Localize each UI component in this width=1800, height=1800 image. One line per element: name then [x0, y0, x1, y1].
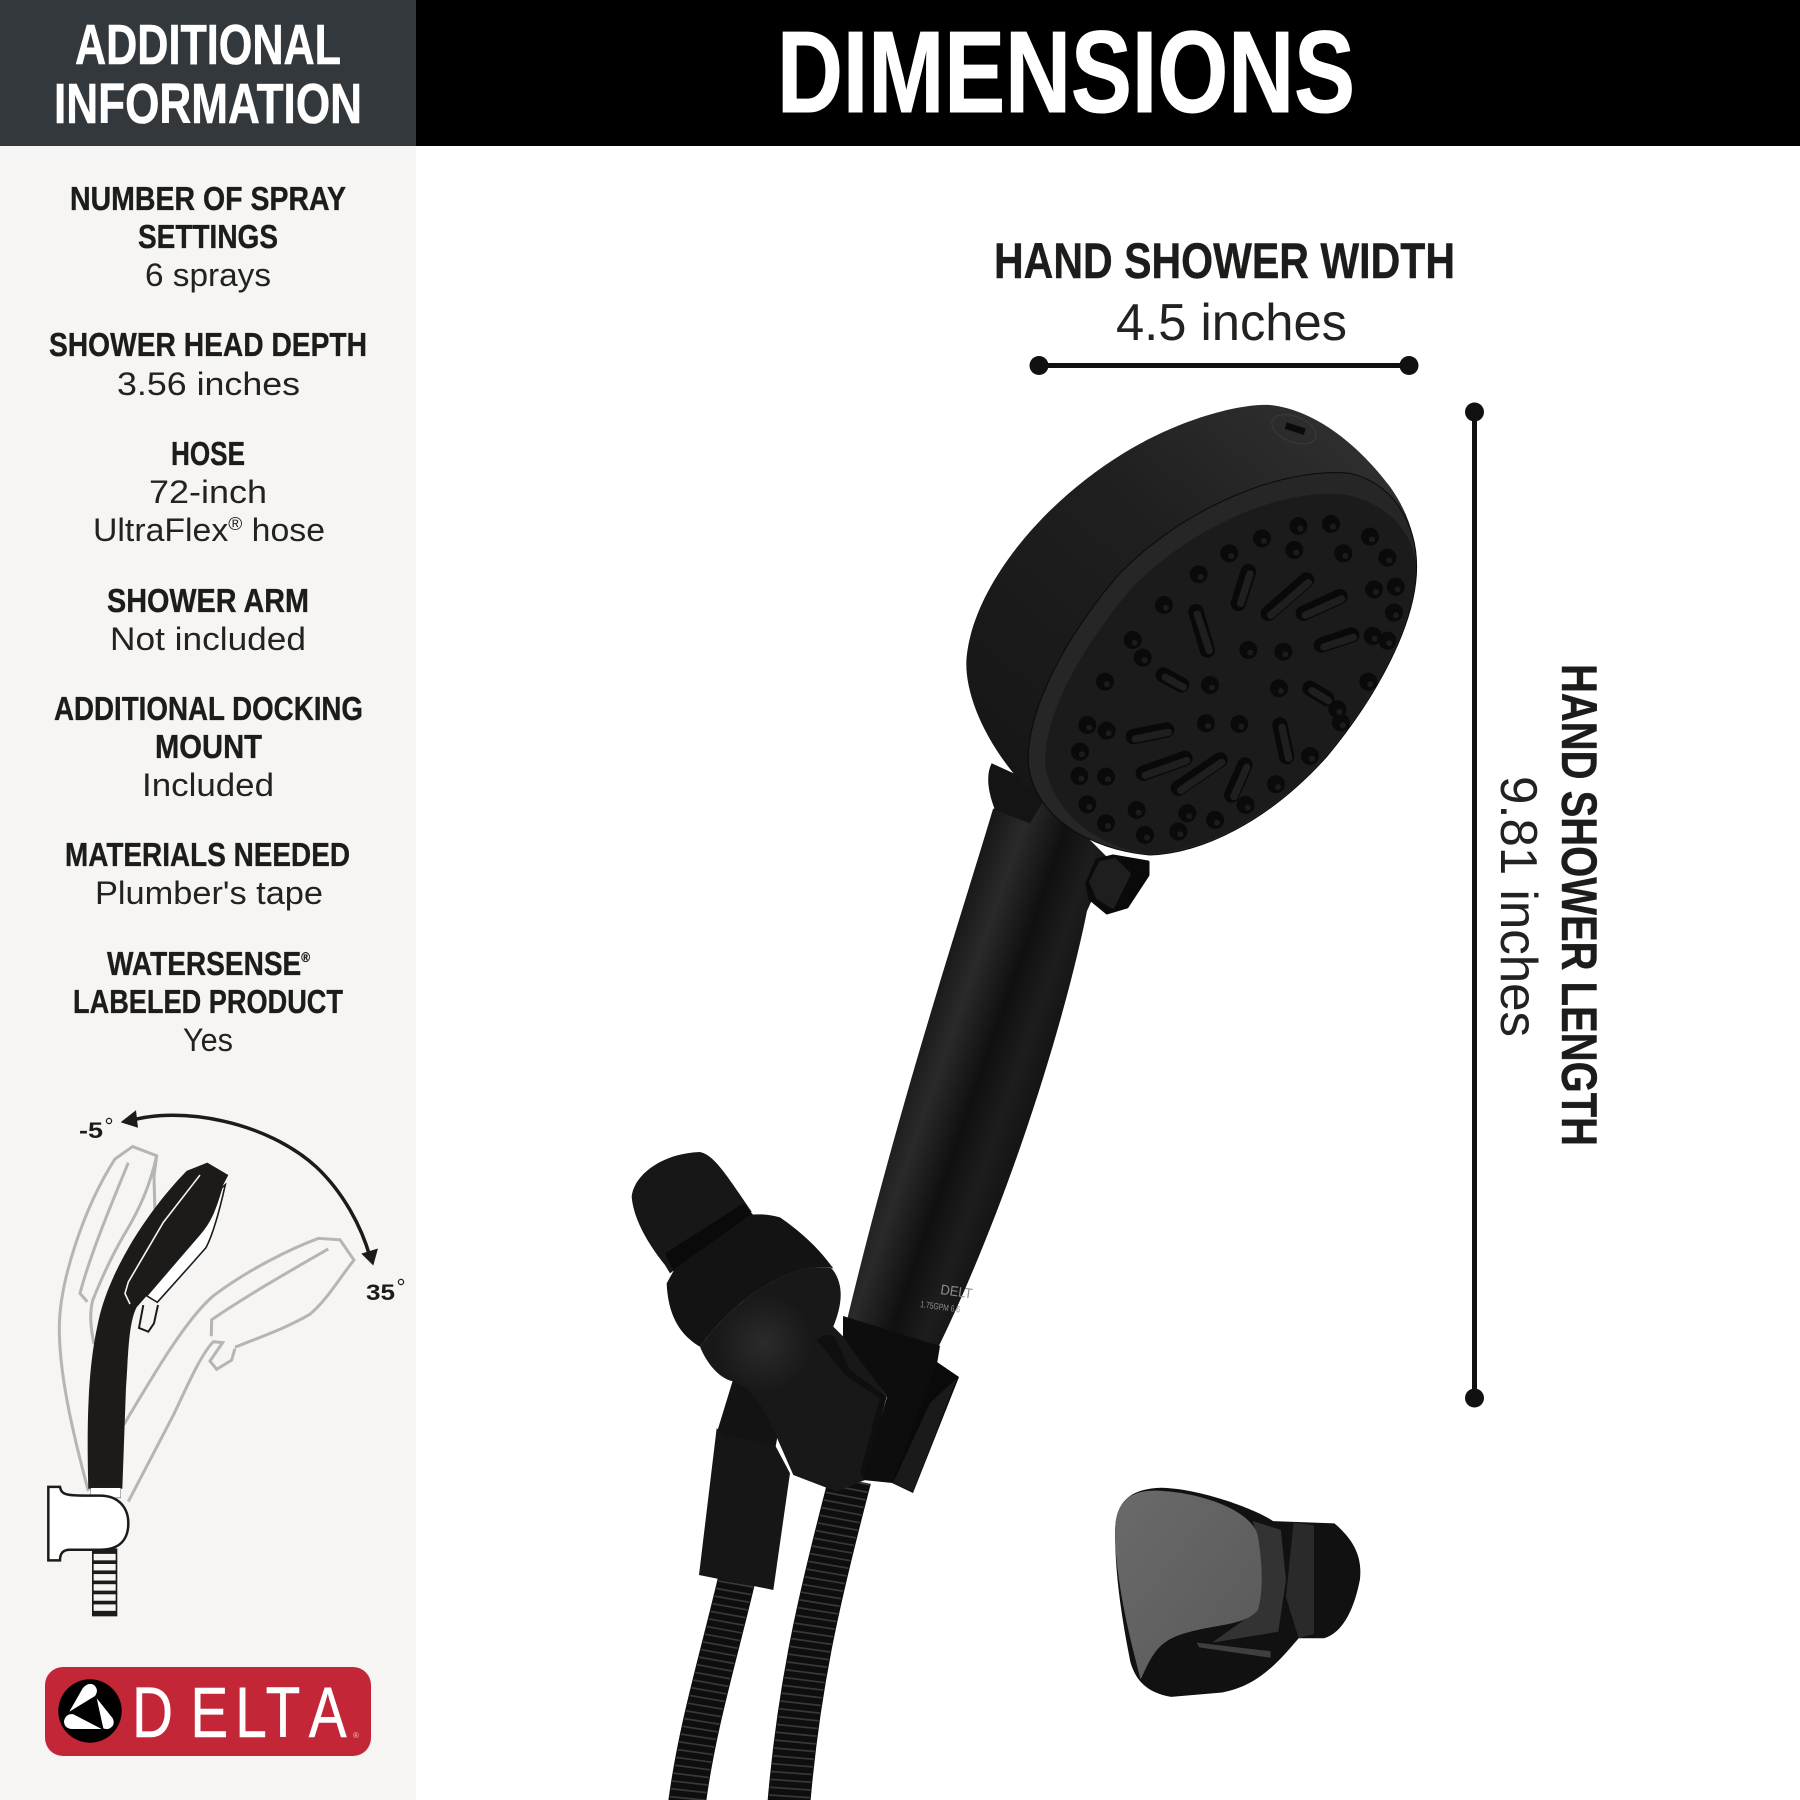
icon: delta emblem	[58, 1679, 122, 1743]
dimension: hand shower length	[1465, 402, 1607, 1408]
handle imprint	[920, 1281, 974, 1315]
spec: shower arm: SHOWER ARM	[107, 582, 309, 619]
spray nozzles	[1079, 524, 1398, 838]
spec: shower head depth: 3.56 inches	[117, 366, 300, 402]
mount shell	[1115, 1488, 1360, 1697]
head front rim	[1028, 473, 1417, 855]
spec: materials needed: Plumber's tape	[95, 875, 323, 911]
title: dimensions: DIMENSIONS	[777, 7, 1355, 137]
product: hand shower handle	[843, 790, 1110, 1493]
head slot	[1268, 409, 1320, 450]
spec: hose: UltraFlex	[93, 512, 221, 548]
head neck bump	[988, 763, 1050, 823]
ghost outline: -5 degree position	[59, 1147, 157, 1491]
spec: number of spray settings: 6 sprays	[145, 257, 271, 293]
mount clip	[1286, 1522, 1314, 1638]
mount slot	[1197, 1643, 1271, 1658]
spec: number of spray settings	[70, 180, 346, 293]
handle imprint: 1.75GPM 6.6	[920, 1299, 961, 1315]
label: 35 degrees: 35	[366, 1280, 395, 1305]
mount band	[1212, 1521, 1286, 1643]
arrow: length line	[1465, 402, 1484, 1408]
spec: hose: hose	[242, 512, 325, 548]
spec: watersense labeled product: ®	[301, 949, 311, 965]
product: shower head	[966, 405, 1417, 855]
product: additional docking mount	[1115, 1488, 1360, 1697]
spec: materials needed: MATERIALS NEEDED	[65, 836, 350, 873]
head spray face	[1045, 494, 1416, 854]
label: width heading: HAND SHOWER WIDTH	[994, 233, 1455, 289]
spec: shower head depth	[49, 326, 367, 402]
diagram: hand shower pivot range	[48, 1110, 404, 1616]
mount face plate	[1115, 1491, 1262, 1679]
label: width value: 4.5 inches	[1116, 294, 1347, 352]
hose: left	[687, 1575, 738, 1800]
icon: degree mark	[398, 1279, 404, 1285]
hose: right	[789, 1480, 850, 1800]
clip bracket	[892, 1362, 959, 1493]
panel: additional information header	[0, 0, 416, 146]
end cap	[632, 1152, 752, 1273]
label: -5 degrees: -5	[79, 1118, 103, 1143]
arrow: range arc	[121, 1110, 378, 1266]
spec: shower arm: Not included	[110, 621, 306, 657]
hand shower silhouette	[88, 1163, 228, 1489]
spec: materials needed	[65, 836, 350, 911]
arrow: width line	[1030, 356, 1418, 375]
registered mark: ®	[353, 1731, 359, 1740]
label: length value: 9.81 inches	[1489, 776, 1547, 1037]
spec: watersense labeled product	[73, 945, 343, 1058]
spec: additional docking mount: ADDITIONAL DOCKING	[54, 690, 363, 727]
wordmark: DELTA	[132, 1673, 347, 1752]
product: spray lever	[1087, 856, 1148, 913]
spec: shower head depth: SHOWER HEAD DEPTH	[49, 326, 367, 363]
spec: additional docking mount	[54, 690, 363, 803]
pipe sleeve	[699, 1428, 790, 1590]
sidebar background panel	[0, 0, 416, 1800]
icon: degree mark	[106, 1118, 112, 1124]
spec: hose: ®	[228, 514, 242, 534]
heading: additional information: ADDITIONAL	[75, 13, 341, 77]
spec: additional docking mount: MOUNT	[155, 728, 262, 765]
spec: additional docking mount: Included	[142, 767, 274, 803]
swivel nut	[667, 1214, 833, 1347]
pipe	[717, 1373, 787, 1450]
panel: dimensions header	[416, 0, 1800, 146]
dock mount and hose	[48, 1487, 128, 1616]
ghost outline: 35 degree position	[124, 1238, 354, 1502]
spec: watersense labeled product: WATERSENSE	[107, 945, 336, 982]
spec: number of spray settings: NUMBER OF SPRAY	[70, 180, 346, 217]
heading: additional information: INFORMATION	[54, 72, 362, 136]
clip shadow edge	[817, 1335, 887, 1480]
product: hoses	[687, 1480, 850, 1800]
dimension: hand shower width	[994, 233, 1455, 375]
spec: shower arm	[107, 582, 309, 657]
mount body	[700, 1267, 887, 1492]
logo: delta	[45, 1667, 371, 1756]
handle imprint: DELT	[940, 1281, 974, 1301]
product: arm mount	[632, 1152, 887, 1590]
spec: hose: HOSE	[171, 435, 245, 472]
cap neck	[665, 1203, 753, 1273]
handle collar	[843, 1316, 940, 1483]
label: length heading: HAND SHOWER LENGTH	[1551, 664, 1607, 1146]
spec: watersense labeled product: LABELED PRODUCT	[73, 983, 343, 1020]
spec: number of spray settings: SETTINGS	[138, 218, 278, 255]
spec: hose: 72-inch	[149, 474, 267, 510]
text block: specifications list	[49, 180, 367, 1058]
spec: watersense labeled product: Yes	[183, 1022, 233, 1058]
spec: hose	[93, 435, 325, 548]
head back shell	[966, 405, 1417, 790]
